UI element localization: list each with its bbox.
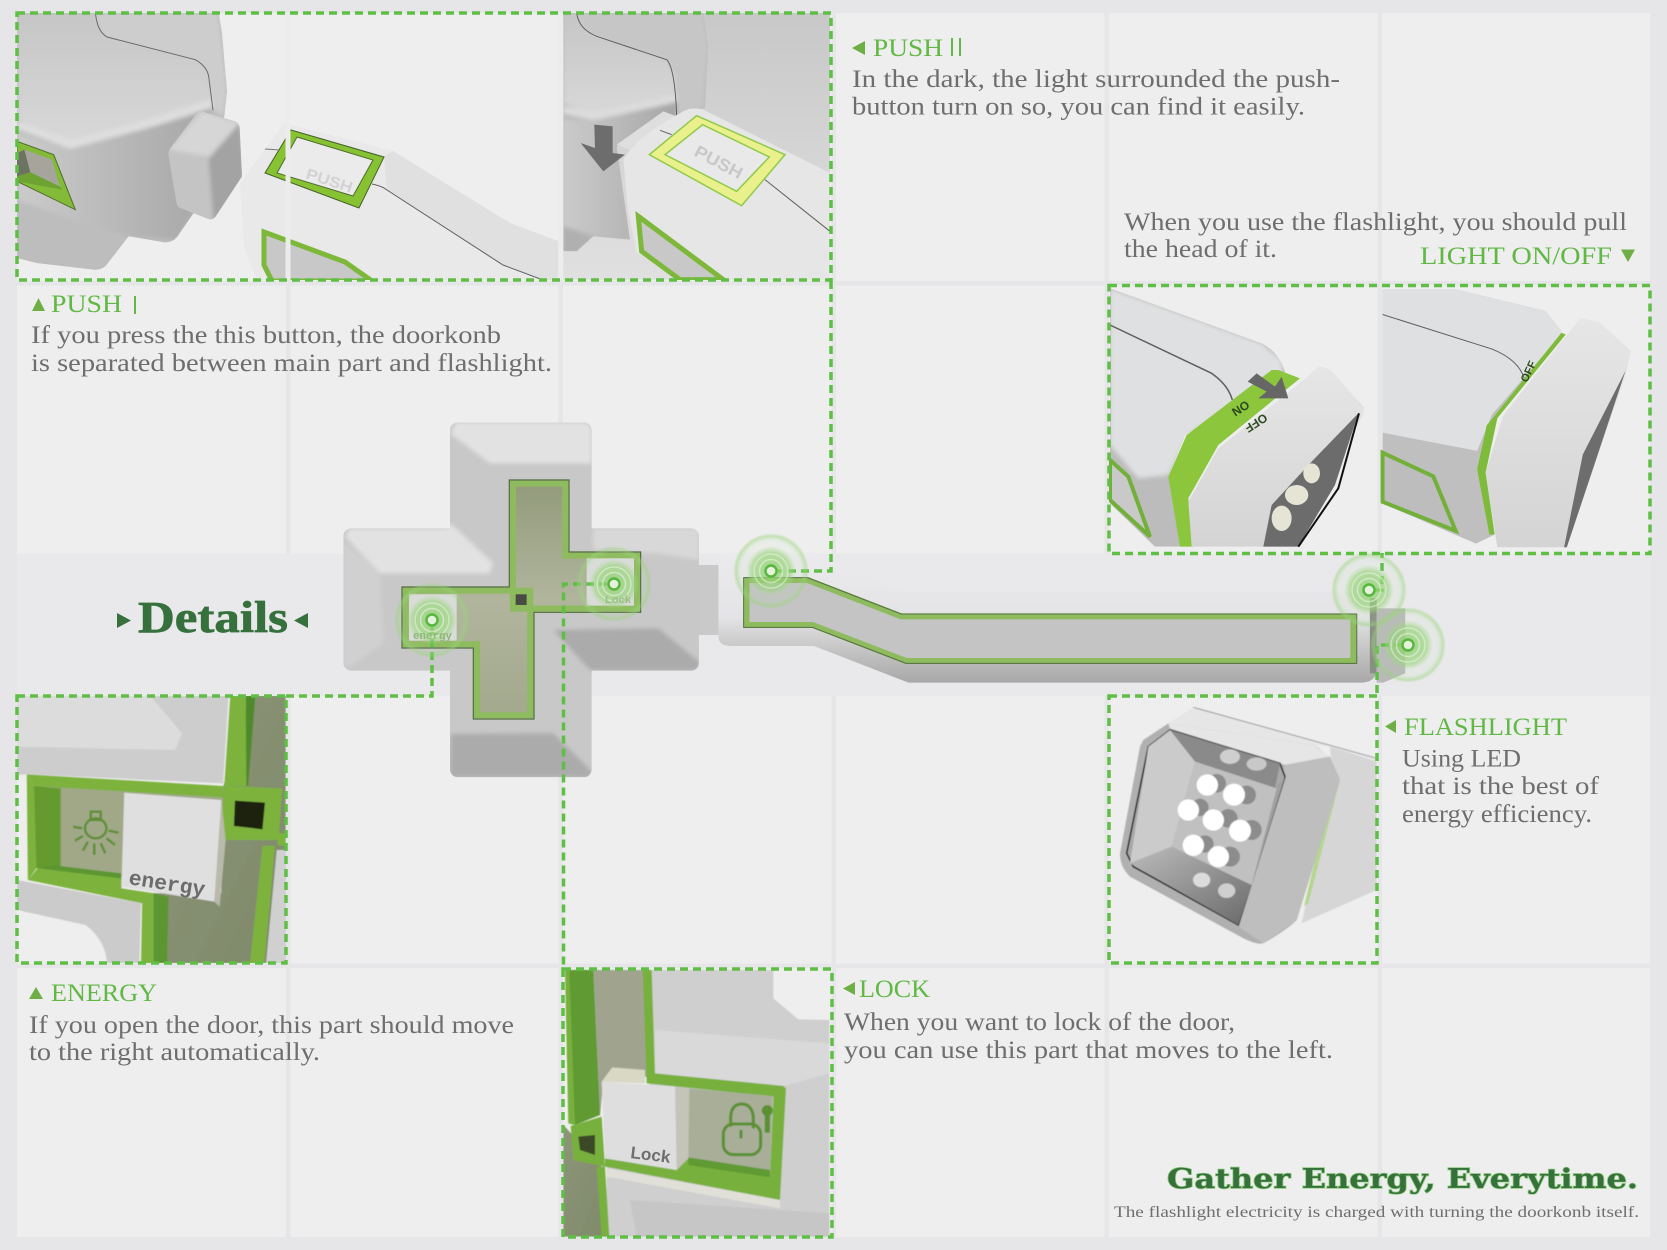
icon: light bulb (73, 812, 119, 855)
left: flashlight pulled open (1105, 285, 1364, 552)
panel: energy close-up (17, 696, 286, 963)
right scene (560, 13, 830, 280)
panel: flashlight LED close-up (1120, 707, 1377, 944)
lock small text: Lock (605, 595, 631, 606)
text block: push I (31, 291, 552, 377)
lock label: Lock (630, 1143, 672, 1167)
text block: flashlight (1385, 714, 1600, 828)
text block: light on/off (1124, 209, 1635, 270)
green channel (406, 484, 637, 715)
right: flashlight closed (1383, 289, 1631, 547)
flashlight handle (718, 553, 1405, 683)
LED shadows (1191, 774, 1262, 867)
text block: energy: ENERGY (51, 980, 157, 1007)
on label: ON (1229, 397, 1252, 419)
tagline: Gather Energy, Everytime. (1167, 1164, 1638, 1195)
left body with connector (17, 13, 250, 280)
text block: lock: you can use this part that moves to the left. (844, 1037, 1333, 1064)
icon: pull arrow (1248, 373, 1288, 398)
text block: lock: When you want to lock of the door, (844, 1009, 1235, 1036)
callout nodes and leader lines (286, 281, 1446, 968)
text on push button right: PUSH (691, 142, 746, 183)
text block: energy: If you open the door, this part should move (29, 1012, 514, 1039)
panel: lock close-up (563, 970, 829, 1237)
grid gap over image (286, 130, 290, 280)
LEDs (1178, 774, 1251, 867)
text block: lock (843, 976, 1333, 1064)
text block: push I: If you press the this button, the doorkonb (31, 322, 501, 349)
panel: push I and push II product images (17, 13, 830, 281)
text block: light on/off: When you use the flashlight, you should pull (1124, 209, 1627, 236)
text block: light on/off: the head of it. (1124, 236, 1277, 263)
lock button (587, 558, 634, 606)
text block: flashlight: Using LED (1402, 746, 1521, 772)
off label left: OFF (1242, 410, 1270, 435)
energy button (214, 800, 226, 907)
text block: energy (29, 980, 514, 1066)
heading: details (117, 593, 308, 642)
text block: push II: button turn on so, you can find it easily. (852, 94, 1305, 120)
energy button (409, 594, 457, 641)
cross-shaped door knob (343, 422, 720, 777)
text block: push II: In the dark, the light surrounded the push- (852, 66, 1340, 93)
text block: flashlight: energy efficiency. (1402, 801, 1592, 828)
text block: lock: LOCK (859, 976, 930, 1003)
icon: padlock (723, 1104, 771, 1155)
tagline: The flashlight electricity is charged with turning the doorkonb itself. (1114, 1204, 1639, 1221)
text block: push II (852, 35, 1340, 120)
connector to handle (697, 565, 720, 635)
center square (510, 588, 533, 612)
flashlight head side view (1377, 608, 1405, 683)
off label right: OFF (1519, 359, 1539, 384)
icon: down arrow (581, 125, 625, 171)
energy label: energy (127, 868, 207, 903)
handle green outline (747, 580, 1353, 661)
text on push button left: PUSH (304, 166, 355, 197)
text block: energy: to the right automatically. (29, 1039, 320, 1066)
flashlight handle with push button (262, 129, 558, 280)
panel: light on/off product images (1105, 285, 1631, 552)
heading: details: Details (138, 593, 288, 642)
text block: flashlight: FLASHLIGHT (1404, 714, 1567, 741)
text block: light on/off: LIGHT ON/OFF (1420, 243, 1612, 270)
text block: push II: PUSH (873, 35, 943, 62)
text block: push I: is separated between main part and flashlight. (31, 350, 552, 377)
tagline (1114, 1164, 1639, 1221)
energy small text: energy (413, 631, 452, 643)
text block: flashlight: that is the best of (1402, 773, 1600, 800)
handle body (718, 553, 1376, 683)
text block: push I: PUSH (51, 291, 122, 318)
